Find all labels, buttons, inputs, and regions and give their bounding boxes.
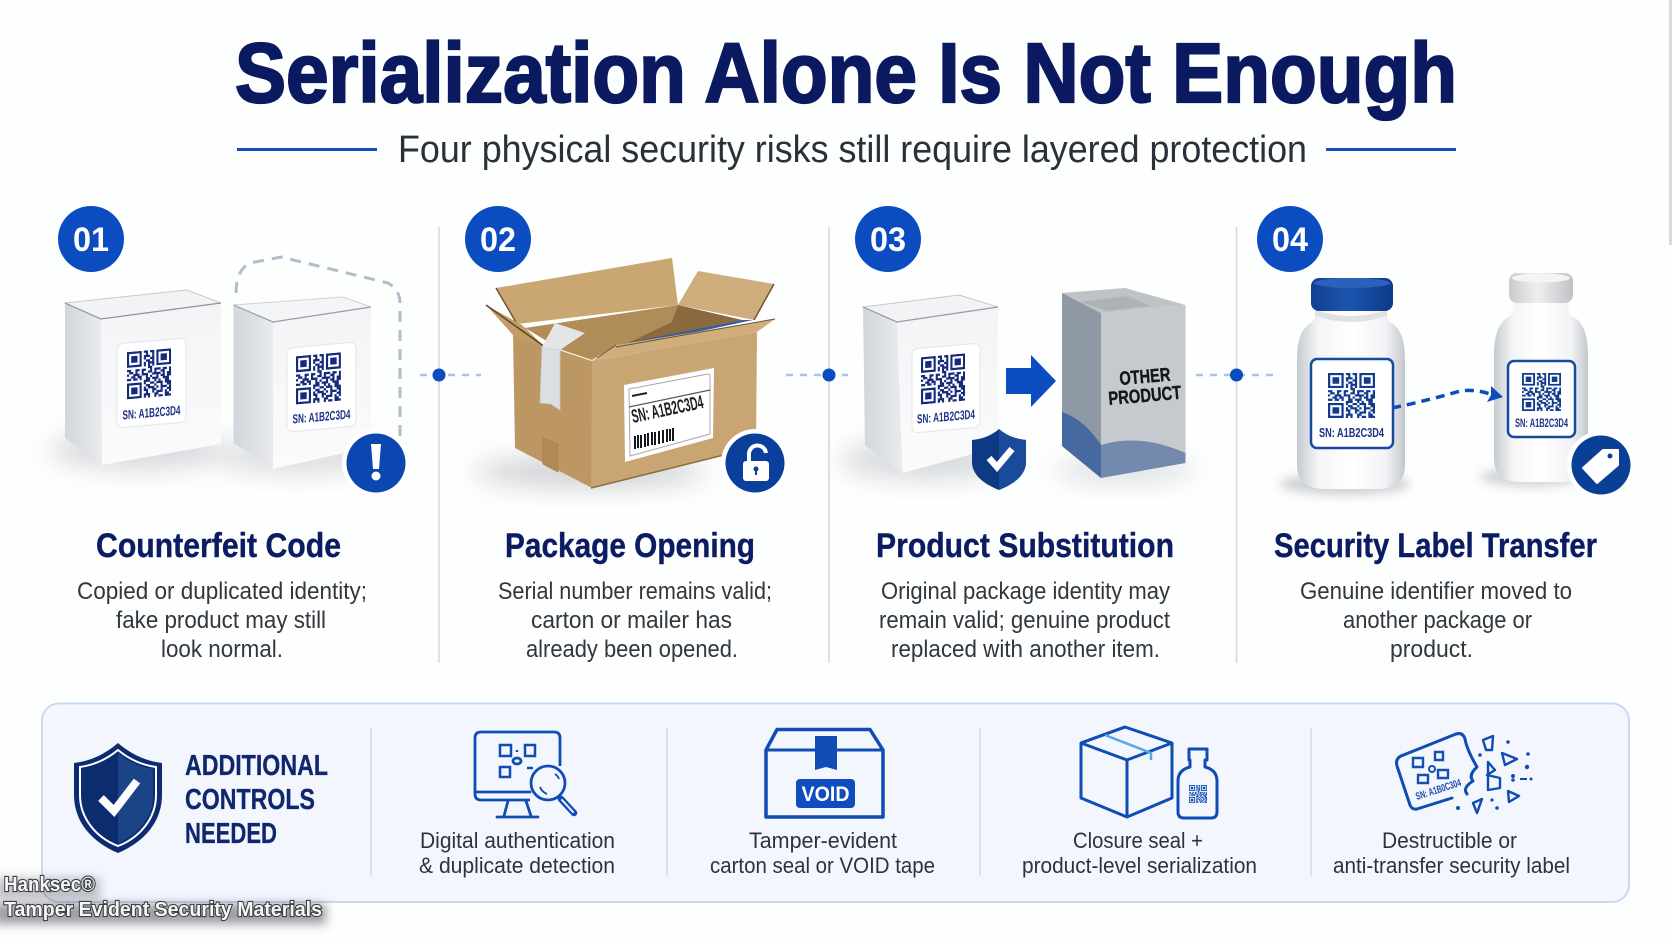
icon: open lock badge [721, 429, 789, 497]
caption: Destructible or [1382, 828, 1517, 853]
caption: product-level serialization [1022, 853, 1257, 878]
panel: security label transfer [1257, 206, 1635, 663]
caption [1333, 828, 1570, 878]
illustration: opened carton: SN: A1B2C3D4 [630, 392, 706, 428]
icon: VOID carton [766, 730, 883, 817]
watermark: Tamper Evident Security Materials [4, 899, 322, 921]
illustration: other product box: OTHER [1119, 365, 1171, 390]
icon: VOID carton: VOID [802, 783, 850, 806]
illustration: other product box [1055, 288, 1195, 484]
heading: additional controls needed [185, 750, 328, 850]
description: fake product may still [116, 607, 326, 634]
description [879, 578, 1170, 663]
caption [419, 828, 615, 878]
watermark: Hanksec® [4, 874, 95, 896]
description [1300, 578, 1572, 663]
heading: Package Opening [505, 527, 755, 565]
heading: additional controls needed: CONTROLS [185, 784, 315, 816]
description: already been opened. [526, 636, 738, 663]
caption: carton seal or VOID tape [710, 853, 935, 878]
illustration: original box: SN: A1B2C3D4 [917, 406, 975, 427]
heading: additional controls needed: NEEDED [185, 818, 277, 850]
illustration: blue cap bottle: SN: A1B2C3D4 [1319, 425, 1385, 440]
heading: Counterfeit Code [96, 527, 341, 565]
illustration: original box [840, 295, 1010, 480]
icon: breaking label: SN: A1B0C304 [1414, 777, 1463, 803]
illustration: genuine and copied boxes: SN: A1B2C3D4 [293, 406, 351, 427]
title: Serialization Alone Is Not Enough [235, 26, 1457, 120]
icon: box and bottle [1081, 727, 1217, 818]
number badge 04 [1257, 206, 1323, 272]
description: remain valid; genuine product [879, 607, 1170, 634]
description [498, 578, 772, 663]
watermark [0, 874, 326, 924]
description: product. [1390, 636, 1473, 663]
heading: Security Label Transfer [1274, 527, 1597, 565]
illustration: other product box: PRODUCT [1108, 383, 1182, 410]
column dividers and connectors [420, 227, 1278, 663]
number badge 02 [465, 206, 531, 272]
number badge 03: 03 [870, 221, 906, 259]
description: replaced with another item. [891, 636, 1160, 663]
caption: Tamper-evident [749, 828, 897, 853]
panel: counterfeit code [50, 206, 410, 663]
number badge 01 [58, 206, 124, 272]
control: tamper-evident seal [710, 730, 935, 878]
illustration: white cap bottle: SN: A1B2C3D4 [1515, 418, 1568, 430]
caption [1022, 828, 1257, 878]
description: Serial number remains valid; [498, 578, 772, 605]
icon: alert badge [342, 429, 410, 497]
caption: Closure seal + [1073, 828, 1203, 853]
description: Original package identity may [881, 578, 1170, 605]
number badge 02: 02 [480, 221, 516, 259]
illustration: white cap bottle [1480, 273, 1588, 487]
panel: additional controls [42, 704, 1629, 902]
heading: additional controls needed: ADDITIONAL [185, 750, 328, 782]
caption: & duplicate detection [419, 853, 615, 878]
subtitle with rules: Four physical security risks still require layered protection [398, 129, 1307, 171]
icon: tag badge [1567, 431, 1635, 499]
number badge 03 [855, 206, 921, 272]
caption [710, 828, 935, 878]
description [77, 578, 367, 663]
panel: product substitution [840, 206, 1195, 663]
control: closure seal [1022, 727, 1257, 878]
icon: large shield [74, 743, 162, 853]
description: Genuine identifier moved to [1300, 578, 1572, 605]
control: destructible label [1333, 734, 1570, 878]
number badge 04: 04 [1272, 221, 1308, 259]
description: Copied or duplicated identity; [77, 578, 367, 605]
icon: monitor and magnifier [475, 732, 574, 817]
illustration: genuine and copied boxes [50, 257, 400, 474]
arrow: substitution [1006, 355, 1056, 407]
description: another package or [1343, 607, 1532, 634]
panel: package opening [465, 206, 789, 663]
icon: breaking label [1396, 734, 1532, 813]
arrow: label transfer [1392, 386, 1503, 408]
description: look normal. [161, 636, 283, 663]
caption: Digital authentication [420, 828, 615, 853]
illustration: opened carton [475, 258, 775, 489]
illustration: genuine and copied boxes: SN: A1B2C3D4 [123, 402, 181, 423]
caption: anti-transfer security label [1333, 853, 1570, 878]
heading: Product Substitution [876, 527, 1174, 565]
description: carton or mailer has [531, 607, 732, 634]
control: digital authentication [419, 732, 615, 878]
icon: shield check [972, 429, 1026, 490]
illustration: blue cap bottle [1280, 278, 1410, 495]
number badge 01: 01 [73, 221, 109, 259]
